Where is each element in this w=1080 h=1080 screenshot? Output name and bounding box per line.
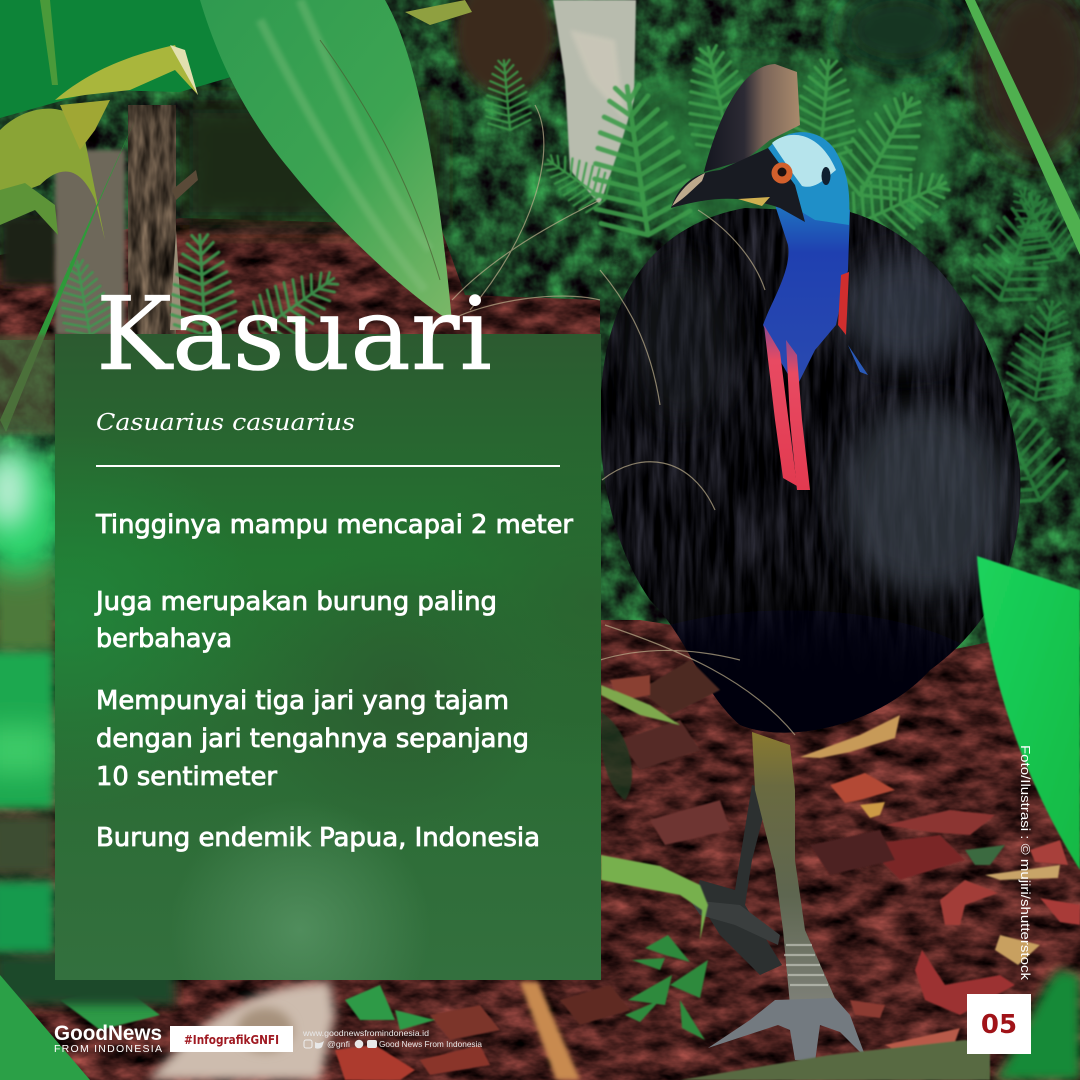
page number [967, 994, 1031, 1054]
bird legs [690, 732, 866, 1062]
footer website and social: @gnfi [327, 1039, 350, 1049]
hashtag badge [170, 1026, 293, 1052]
fact: most dangerous bird: berbahaya [96, 624, 232, 654]
large leaf top [200, 0, 452, 322]
grass blades crossing the scene [450, 105, 795, 735]
fact: most dangerous bird: Juga merupakan burung paling [94, 587, 497, 617]
hashtag badge: #InfografikGNFI [184, 1033, 279, 1047]
scientific name: Casuarius casuarius [96, 410, 355, 436]
fern fronds [53, 40, 1080, 516]
logo: GoodNews [54, 1022, 162, 1055]
fact: three sharp toes: dengan jari tengahnya sepanjang [96, 724, 529, 754]
fact: height: Tingginya mampu mencapai 2 meter [95, 510, 574, 540]
tree trunks [55, 0, 636, 335]
footer website and social: www.goodnewsfromindonesia.id [302, 1028, 429, 1038]
yellow-green leaves top left [0, 0, 1080, 432]
bird neck [763, 194, 850, 388]
blurred foreground: left green leaves and grass [0, 335, 335, 1080]
fact: endemic: Burung endemik Papua, Indonesia [96, 823, 540, 853]
panel: green translucent card [55, 334, 601, 980]
logo: GoodNews: GoodNews [54, 1022, 162, 1045]
top-left dark green leaf [0, 0, 238, 118]
bird wattle: red [764, 272, 868, 490]
ground leaves [60, 660, 1080, 1080]
logo: GoodNews: FROM INDONESIA [54, 1043, 162, 1055]
fact: three sharp toes: 10 sentimeter [96, 762, 278, 792]
title: Kasuari [96, 275, 492, 393]
bird body [601, 208, 1020, 733]
page number: 05 [981, 1010, 1017, 1040]
fact: three sharp toes [96, 686, 529, 792]
footer website and social: Good News From Indonesia [379, 1039, 482, 1049]
photo credit: Foto/Ilustrasi : © mujiri/shutterstock [1018, 745, 1032, 981]
fact: most dangerous bird [94, 587, 497, 654]
footer website and social [302, 1028, 482, 1049]
fact: three sharp toes: Mempunyai tiga jari yang tajam [96, 686, 509, 716]
bird head and casque [671, 64, 849, 225]
divider [96, 465, 560, 467]
blurred foreground: right green leaves [977, 556, 1080, 1080]
